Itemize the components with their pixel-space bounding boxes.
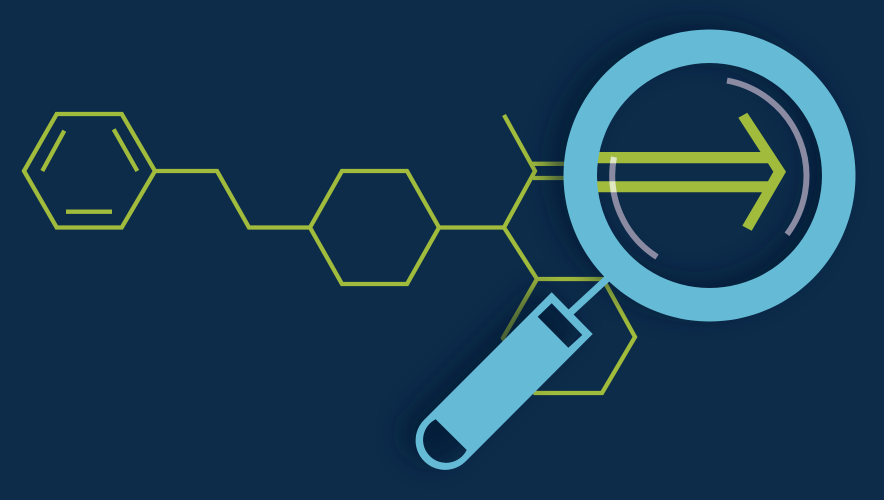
magnifier neck bbox=[570, 277, 609, 313]
upper right arc bbox=[727, 81, 806, 234]
cyclohexane ring bbox=[310, 171, 439, 284]
magnifier cast shadow bbox=[402, 22, 842, 463]
lower left arc bbox=[612, 157, 657, 257]
lower hexagon ring bbox=[503, 228, 635, 393]
arc overlap highlight bbox=[609, 156, 617, 192]
zigzag chain bbox=[155, 171, 310, 228]
molecule structure bbox=[24, 114, 635, 393]
benzene ring bbox=[24, 114, 155, 228]
magnifier lens ring bbox=[564, 30, 856, 322]
connecting bond bbox=[439, 225, 504, 230]
magnified arrow bbox=[590, 113, 786, 231]
grey orbit arcs bbox=[612, 81, 806, 257]
magnifier handle bbox=[416, 292, 593, 470]
methyl and double bond branch bbox=[504, 115, 575, 228]
